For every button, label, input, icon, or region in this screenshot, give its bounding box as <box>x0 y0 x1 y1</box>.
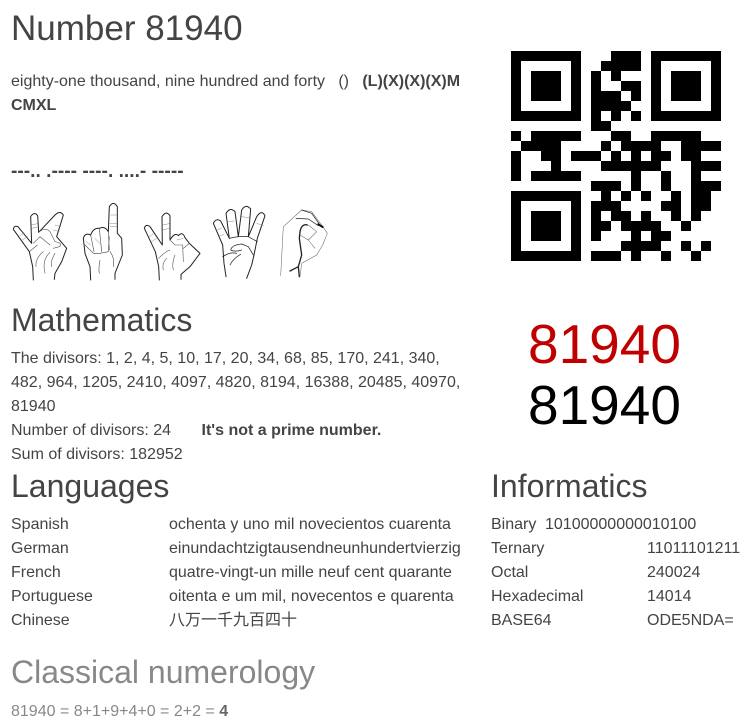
informatics table: 11011101211 <box>647 540 740 557</box>
informatics table: Ternary <box>491 540 544 557</box>
informatics table: 14014 <box>647 588 692 605</box>
icon: QR code <box>511 51 721 261</box>
icon: hand sign 0 <box>281 210 327 277</box>
numerology calculation: 81940 = 8+1+9+4+0 = 2+2 = 4 <box>11 703 228 720</box>
icon: sign language hands <box>12 202 328 280</box>
icon: hand sign 8 <box>13 212 67 280</box>
heading: Mathematics: Mathematics <box>11 302 192 338</box>
divisors text block: 482, 964, 1205, 2410, 4097, 4820, 8194, 16388, 20485, 40970, <box>11 374 460 391</box>
divisors text block: Number of divisors: 24 It's not a prime number. <box>11 422 381 439</box>
informatics table: Hexadecimal <box>491 588 583 605</box>
icon: hand sign 1 <box>83 203 122 280</box>
heading: Languages: Languages <box>11 468 169 504</box>
languages table: Portuguese <box>11 588 93 605</box>
red number 81940: 81940 <box>528 313 681 375</box>
number in words and roman numerals: CMXL <box>11 97 56 114</box>
languages table <box>11 516 461 629</box>
languages table: ochenta y uno mil novecientos cuarenta <box>169 516 451 533</box>
number in words and roman numerals: eighty-one thousand, nine hundred and forty () (L)(X)(X)(X)M <box>11 73 460 90</box>
informatics table: Binary <box>491 516 536 533</box>
informatics table: BASE64 <box>491 612 551 629</box>
divisors text block <box>11 350 460 463</box>
informatics table: Octal <box>491 564 528 581</box>
languages table: French <box>11 564 61 581</box>
divisors text block: Sum of divisors: 182952 <box>11 446 183 463</box>
languages table: 八万一千九百四十 <box>169 612 297 629</box>
morse code: ---.. .---- ----. ....- ----- <box>11 161 184 182</box>
languages table: oitenta e um mil, novecentos e quarenta <box>169 588 454 605</box>
languages table: quatre-vingt-un mille neuf cent quarante <box>169 564 452 581</box>
informatics table: 10100000000010100 <box>545 516 696 533</box>
icon: hand sign 4 <box>213 206 265 278</box>
informatics table: 240024 <box>647 564 700 581</box>
languages table: German <box>11 540 69 557</box>
heading: Informatics: Informatics <box>491 468 647 504</box>
languages table: Chinese <box>11 612 70 629</box>
languages table: einundachtzigtausendneunhundertvierzig <box>169 540 461 557</box>
title: Number 81940 <box>11 9 243 48</box>
languages table: Spanish <box>11 516 69 533</box>
informatics table: ODE5NDA= <box>647 612 734 629</box>
informatics table <box>491 516 740 629</box>
heading: Classical numerology: Classical numerology <box>11 654 315 690</box>
black number 81940: 81940 <box>528 374 681 436</box>
icon: hand sign 9 <box>144 213 200 280</box>
number in words and roman numerals <box>11 73 460 114</box>
divisors text block: 81940 <box>11 398 56 415</box>
divisors text block: The divisors: 1, 2, 4, 5, 10, 17, 20, 34, 68, 85, 170, 241, 340, <box>11 350 440 367</box>
